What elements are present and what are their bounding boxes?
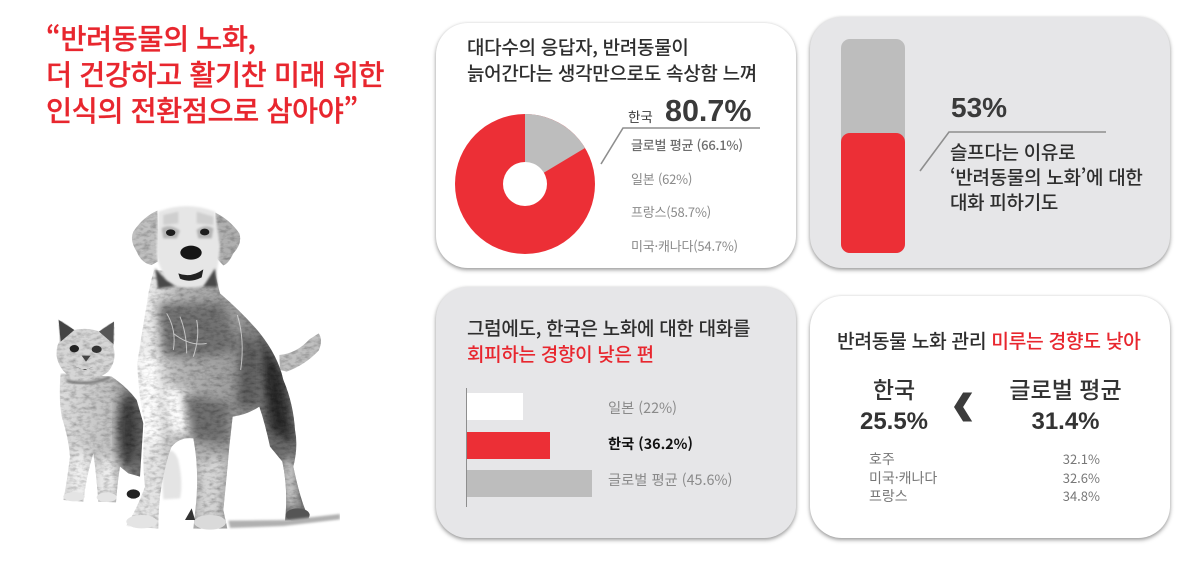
panel: comparison card xyxy=(810,296,1170,538)
stat: global average xyxy=(1009,371,1122,435)
panel: bar gauge card xyxy=(810,17,1170,268)
donut chart xyxy=(455,114,595,254)
list: comparison values xyxy=(631,135,743,254)
stat: Korea: 25.5% xyxy=(860,408,928,435)
title: 더 건강하고 활기찬 미래 위한 xyxy=(46,53,384,94)
stat description xyxy=(950,138,1143,215)
dog ears xyxy=(132,211,158,265)
panel: donut card xyxy=(436,23,796,268)
heading: bars card xyxy=(467,314,750,367)
callout: Korea value: 80.7% xyxy=(665,94,751,128)
stat description: 슬프다는 이유로 xyxy=(950,138,1075,165)
panel: horizontal bars card xyxy=(436,287,796,538)
ground shadow xyxy=(228,514,340,528)
title: “반려동물의 노화, xyxy=(46,17,256,58)
dog tail xyxy=(279,333,321,372)
callout leader line xyxy=(920,131,1106,172)
illustration: dog and cat xyxy=(56,206,340,530)
title: 인식의 전환점으로 삼아야” xyxy=(46,89,358,130)
list: country values: 34.8% xyxy=(1063,486,1100,505)
stat: Korea: 한국 xyxy=(873,371,915,405)
list: comparison values: 일본 (62%) xyxy=(631,168,692,188)
bar chart xyxy=(466,388,732,507)
label: Korea: 한국 (36.2%) xyxy=(608,433,693,454)
icon: less-than chevron xyxy=(954,392,972,422)
label: global average: 글로벌 평균 (45.6%) xyxy=(608,469,732,490)
bar: Japan xyxy=(467,393,523,420)
bar: Korea xyxy=(467,432,550,459)
list: country names: 프랑스 xyxy=(869,486,908,506)
list: comparison values: 미국·캐나다(54.7%) xyxy=(631,236,738,254)
cat xyxy=(57,319,181,507)
list: country values: 32.1% xyxy=(1063,449,1100,468)
heading: donut card xyxy=(467,33,757,86)
dog head xyxy=(156,206,220,287)
stat: Korea xyxy=(860,371,928,435)
stat value: 53% xyxy=(951,92,1007,123)
heading: bars card: 그럼에도, 한국은 노화에 대한 대화를 xyxy=(467,314,750,341)
title xyxy=(46,17,384,130)
stat: global average: 31.4% xyxy=(1031,408,1100,435)
heading: bars card: 회피하는 경향이 낮은 편 xyxy=(467,340,654,367)
stat description: 대화 피하기도 xyxy=(950,188,1058,215)
list: country values xyxy=(1063,449,1100,505)
list: comparison values: 글로벌 평균 (66.1%) xyxy=(631,135,743,154)
dog paws xyxy=(126,515,157,528)
list: country names xyxy=(869,449,937,506)
list: country names: 호주 xyxy=(869,449,895,469)
bar: global average xyxy=(467,470,592,497)
callout: Korea value: 한국 xyxy=(628,106,653,126)
heading: comparison card: 반려동물 노화 관리 미루는 경향도 낮아 xyxy=(837,326,1140,354)
callout leader line xyxy=(600,127,760,164)
list: country values: 32.6% xyxy=(1063,468,1100,486)
list: country names: 미국·캐나다 xyxy=(869,468,937,488)
dog xyxy=(123,206,313,533)
heading: donut card: 늙어간다는 생각만으로도 속상함 느껴 xyxy=(467,59,757,86)
gauge bar xyxy=(841,39,905,253)
heading: donut card: 대다수의 응답자, 반려동물이 xyxy=(467,33,689,60)
label: Japan: 일본 (22%) xyxy=(608,397,677,418)
stat: global average: 글로벌 평균 xyxy=(1009,371,1122,405)
list: comparison values: 프랑스(58.7%) xyxy=(631,202,711,221)
stat description: ‘반려동물의 노화’에 대한 xyxy=(950,163,1143,190)
